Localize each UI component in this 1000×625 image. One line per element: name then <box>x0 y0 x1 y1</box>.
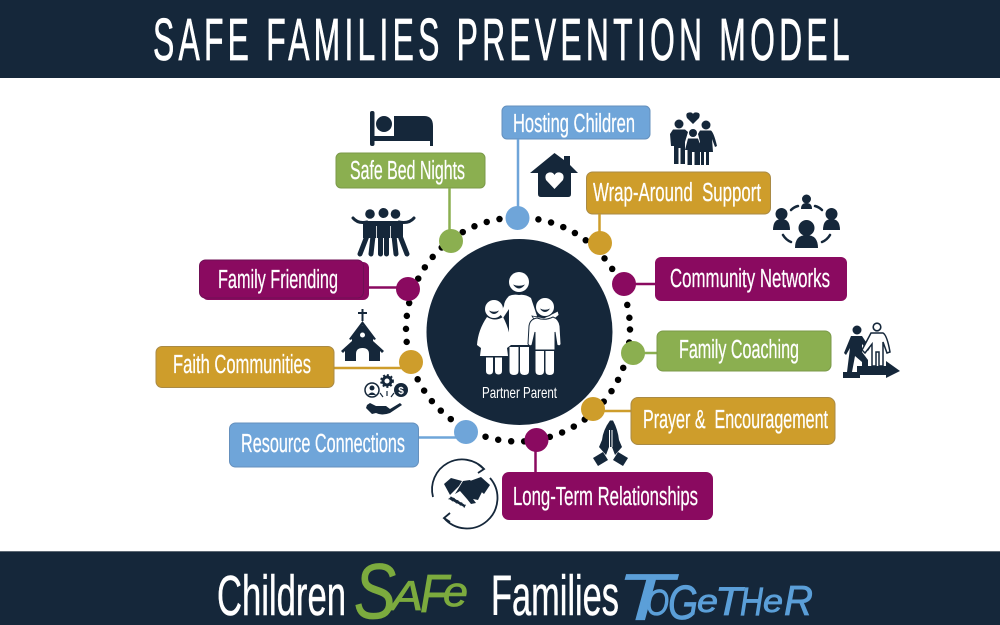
header band with title <box>0 0 1000 78</box>
header band with title: SAFE FAMILIES PREVENTION MODEL <box>153 8 850 74</box>
node: wrap-around support <box>586 172 770 255</box>
node: wrap-around support: Wrap-Around Support <box>593 179 761 207</box>
node: safe bed nights <box>336 153 485 253</box>
brush word: safe <box>354 547 468 625</box>
node: hosting children <box>502 106 650 230</box>
node: community networks <box>612 257 847 301</box>
icon: praying hands <box>593 420 628 466</box>
icon: coach helping person step up <box>843 323 900 378</box>
brush word: together: O <box>646 582 669 623</box>
brush word: together: T <box>715 580 745 624</box>
brush word: safe: F <box>420 564 452 624</box>
node: faith communities: Faith Communities <box>173 351 311 379</box>
node: resource connections <box>230 420 478 467</box>
icon: resource connections hand: $ <box>398 386 404 397</box>
brush word: together: e <box>697 583 718 619</box>
smiles on the family faces <box>489 284 550 314</box>
node: faith communities <box>156 346 423 388</box>
central circle: partner parent <box>426 239 612 425</box>
brush word: together: e <box>763 583 783 619</box>
node: community networks: Community Networks <box>670 265 830 293</box>
node: prayer and encouragement: Prayer & Encouragement <box>643 406 828 434</box>
node: long-term relationships <box>502 428 713 520</box>
label: partner parent: Partner Parent <box>482 385 557 402</box>
icon: community network <box>773 194 840 248</box>
brush word: safe: A <box>388 572 423 619</box>
icon: church <box>341 309 384 361</box>
icon: family with heart <box>670 112 717 165</box>
node: safe bed nights: Safe Bed Nights <box>350 157 465 185</box>
icon: house with heart <box>530 153 578 197</box>
icon: resource connections hand <box>365 375 408 414</box>
icon: handshake in circular arrows <box>432 459 497 528</box>
brush word: safe: e <box>443 568 468 615</box>
node: long-term relationships: Long-Term Relationships <box>513 483 698 511</box>
node: resource connections: Resource Connections <box>241 430 405 458</box>
icon: parent and two children <box>477 272 561 375</box>
node: family friending: Family Friending <box>218 266 338 294</box>
icon: bed <box>370 111 433 146</box>
brush word: together <box>617 560 813 625</box>
node: family coaching: Family Coaching <box>679 336 799 364</box>
dotted ring <box>406 218 630 442</box>
brush word: together: H <box>740 580 763 624</box>
icon: friends embracing <box>353 208 414 254</box>
node: prayer and encouragement <box>581 397 835 444</box>
brush word: together: R <box>784 577 813 624</box>
footer band with tagline <box>0 547 1000 625</box>
node: family friending <box>200 260 420 301</box>
node: family coaching <box>621 331 831 371</box>
node: hosting children: Hosting Children <box>513 110 635 138</box>
